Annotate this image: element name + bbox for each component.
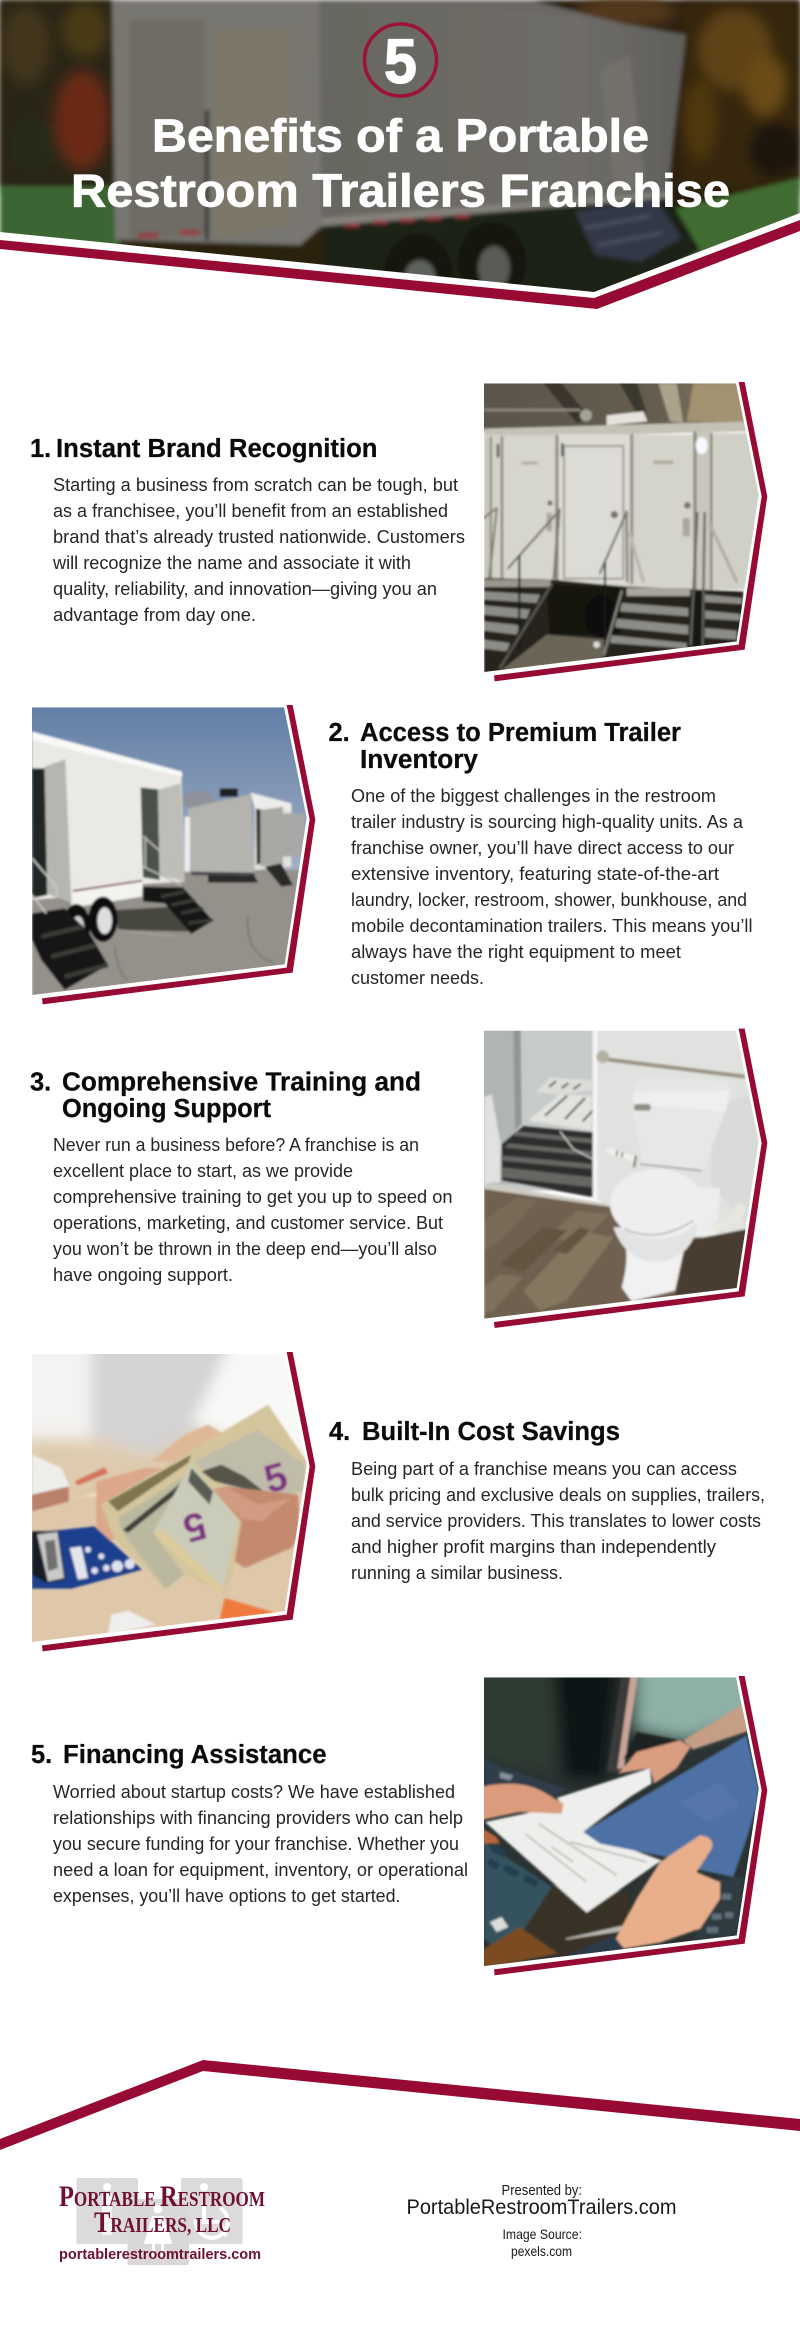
panel: benefit 4 — [32, 1352, 764, 1652]
body text: benefit 3: comprehensive training to get you up to speed on — [53, 1187, 452, 1207]
body text: benefit 2: One of the biggest challenges in the restroom — [351, 786, 716, 806]
heading: benefit 1: 1. — [30, 435, 51, 463]
footer chevron band — [0, 2060, 800, 2150]
heading: benefit 2: Inventory — [360, 746, 479, 774]
body text: benefit 3: Never run a business before? A franchise is an — [53, 1135, 419, 1155]
body text: benefit 4: and higher profit margins than independently — [351, 1537, 716, 1557]
body text: benefit 2: extensive inventory, featuring state-of-the-art — [351, 864, 719, 884]
frame accent — [42, 1352, 315, 1651]
body text: benefit 3 — [53, 1135, 452, 1285]
panel: benefit 1 — [30, 378, 780, 681]
hero bottom chevron band — [0, 220, 800, 309]
icon: restroom sign tiles — [76, 2178, 242, 2265]
photo: hand holding cash and calculator — [32, 1352, 316, 1652]
presented by credit: Presented by: — [502, 2183, 582, 2199]
body text: benefit 3: you won’t be thrown in the deep end—you’ll also — [53, 1239, 437, 1259]
body text: benefit 3: operations, marketing, and customer service. But — [53, 1213, 443, 1233]
presented by credit: PortableRestroomTrailers.com — [406, 2196, 676, 2219]
body text: benefit 5: expenses, you’ll have options to get started. — [53, 1886, 400, 1906]
heading: benefit 2: Access to Premium Trailer — [360, 719, 681, 747]
heading: benefit 3: Ongoing Support — [62, 1095, 271, 1123]
body text: benefit 5: relationships with financing providers who can help — [53, 1808, 463, 1828]
frame accent — [42, 705, 315, 1004]
heading: benefit 5: 5. — [31, 1741, 52, 1769]
body text: benefit 2: trailer industry is sourcing high-quality units. As a — [351, 812, 744, 832]
image source credit — [502, 2226, 582, 2259]
photo: white trailers in lot — [28, 700, 328, 1004]
body text: benefit 5: you secure funding for your franchise. Whether you — [53, 1834, 459, 1854]
frame accent — [494, 1029, 767, 1328]
body text: benefit 2: always have the right equipment to meet — [351, 942, 681, 962]
body text: benefit 4: bulk pricing and exclusive deals on supplies, trailers, — [351, 1485, 765, 1505]
heading: benefit 4: Built-In Cost Savings — [362, 1418, 620, 1446]
photo: trailer toilet interior — [480, 1024, 767, 1328]
logo wordmark: portablerestroomtrailers.com — [59, 2247, 261, 2263]
title: Restroom Trailers Franchise — [71, 164, 730, 216]
body text: benefit 4 — [351, 1459, 765, 1583]
photo: hand holding cash and calculator: 5 — [260, 1454, 292, 1502]
logo wordmark: PORTABLE RESTROOM — [59, 2180, 265, 2213]
body text: benefit 1: as a franchisee, you’ll benefit from an established — [53, 501, 448, 521]
photo: hand holding cash and calculator: 5 — [179, 1503, 211, 1551]
body text: benefit 2 — [351, 786, 752, 988]
frame accent — [494, 382, 767, 681]
body text: benefit 2: laundry, locker, restroom, shower, bunkhouse, and — [351, 890, 747, 910]
number badge — [364, 24, 436, 97]
body text: benefit 1: brand that’s already trusted nationwide. Customers — [53, 527, 465, 547]
body text: benefit 4: running a similar business. — [351, 1563, 563, 1583]
heading: benefit 4: 4. — [329, 1418, 350, 1446]
body text: benefit 2: franchise owner, you’ll have direct access to our — [351, 838, 734, 858]
heading: benefit 2: 2. — [328, 719, 350, 747]
photo: hands exchanging documents — [484, 1676, 768, 1976]
body text: benefit 1: will recognize the name and associate it with — [52, 553, 411, 573]
panel: benefit 3 — [30, 1024, 767, 1328]
body text: benefit 5: Worried about startup costs? We have established — [53, 1782, 455, 1802]
body text: benefit 2: customer needs. — [351, 968, 484, 988]
body text: benefit 4: Being part of a franchise means you can access — [351, 1459, 737, 1479]
body text: benefit 2: mobile decontamination trailers. This means you’ll — [351, 916, 752, 936]
heading: benefit 2 — [328, 719, 681, 774]
body text: benefit 3: excellent place to start, as we provide — [53, 1161, 353, 1181]
body text: benefit 1: advantage from day one. — [53, 605, 256, 625]
heading: benefit 5: Financing Assistance — [63, 1741, 326, 1769]
panel: benefit 5 — [32, 1676, 768, 1976]
title: Benefits of a Portable — [152, 110, 649, 162]
logo wordmark: TRAILERS, LLC — [94, 2206, 231, 2239]
heading: benefit 1: Instant Brand Recognition — [56, 435, 378, 463]
image source credit: pexels.com — [511, 2243, 572, 2259]
frame accent — [494, 1676, 767, 1975]
body text: benefit 1: Starting a business from scratch can be tough, but — [53, 475, 458, 495]
body text: benefit 1 — [52, 475, 465, 625]
panel: benefit 2 — [28, 700, 752, 1004]
heading: benefit 3: 3. — [30, 1068, 51, 1096]
logo wordmark — [59, 2180, 265, 2263]
number badge: 5 — [384, 27, 417, 97]
body text: benefit 3: have ongoing support. — [53, 1265, 233, 1285]
photo: restroom trailer doors — [480, 378, 780, 681]
hero banner photo — [0, 0, 800, 310]
image source credit: Image Source: — [502, 2226, 582, 2242]
logo: Portable Restroom Trailers — [59, 2178, 265, 2265]
heading: benefit 3 — [30, 1068, 421, 1123]
body text: benefit 5: need a loan for equipment, inventory, or operational — [53, 1860, 468, 1880]
presented by credit — [406, 2183, 676, 2219]
heading: benefit 3: Comprehensive Training and — [62, 1068, 421, 1096]
body text: benefit 1: quality, reliability, and innovation—giving you an — [53, 579, 437, 599]
title — [71, 110, 730, 216]
body text: benefit 5 — [53, 1782, 468, 1906]
body text: benefit 4: and service providers. This translates to lower costs — [351, 1511, 761, 1531]
